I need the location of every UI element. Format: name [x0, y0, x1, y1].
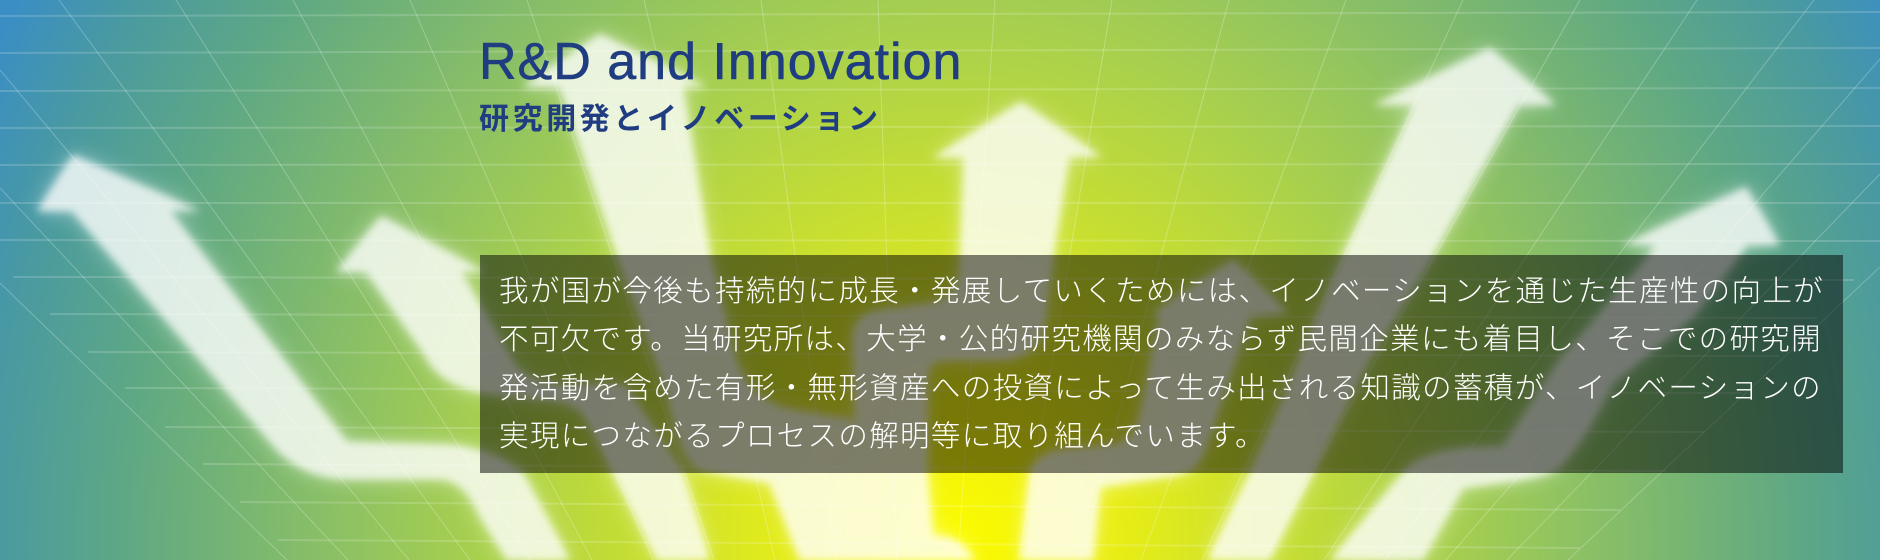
arrow 1: far left: [37, 155, 570, 560]
arrow base glow: centre bottom: [895, 536, 975, 560]
title: R&D and Innovation: [479, 33, 962, 91]
arrow 7: far right: [1330, 187, 1780, 560]
subtitle: 研究開発とイノベーション: [479, 103, 882, 136]
arrow 3: tall centre-left: [522, 34, 877, 560]
arrow 5: behind panel: [1020, 260, 1288, 560]
arrow 2: second from left: [336, 216, 710, 560]
panel: description: [480, 255, 1843, 473]
text block: description: 我が国が今後も持続的に成長・発展していくためには、イノベーションを通じた生産性の向上が: [499, 275, 1824, 308]
text block: description: [499, 275, 1824, 453]
text block: description: 発活動を含めた有形・無形資産への投資によって生み出される知識の蓄積が、イノベーションの: [499, 372, 1822, 405]
text block: description: 不可欠です。当研究所は、大学・公的研究機関のみならず民間企業にも着目し、そこでの研究開: [499, 323, 1822, 356]
arrow 6: tall right: [1207, 48, 1556, 560]
arrow 4: centre: [853, 102, 1102, 560]
text block: description: 実現につながるプロセスの解明等に取り組んでいます。: [499, 420, 1266, 453]
